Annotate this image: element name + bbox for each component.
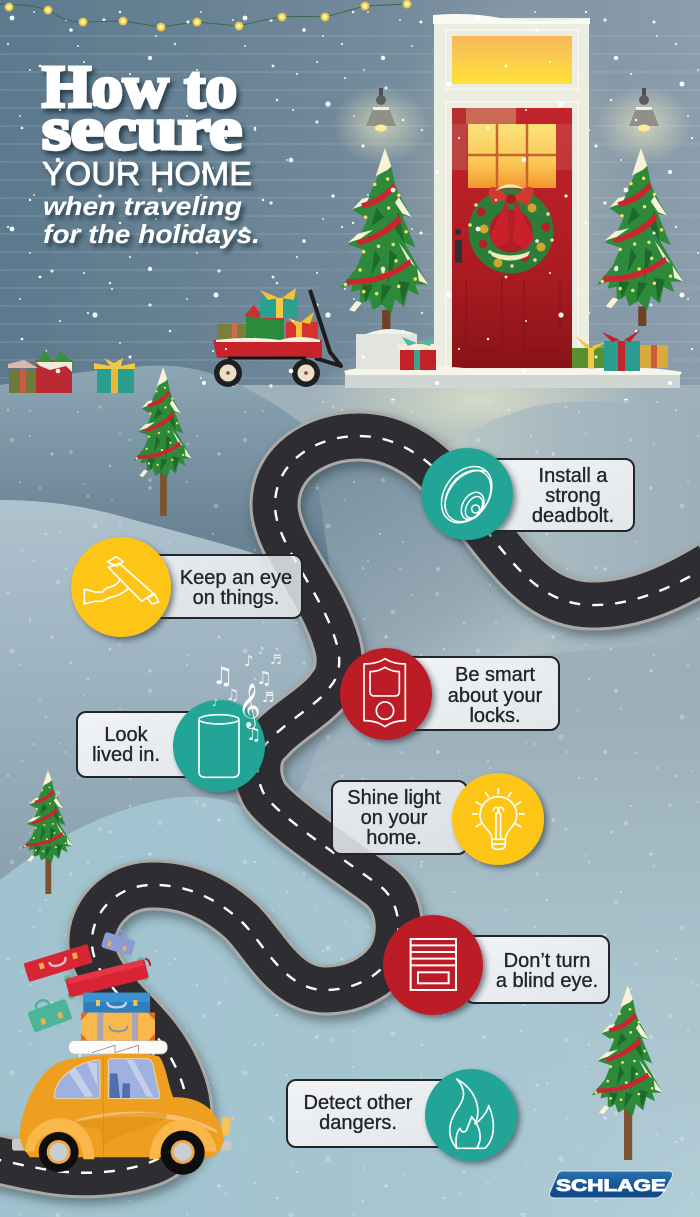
callout: shine light on your home: [332, 773, 544, 865]
callout: be smart about your locks: locks.: [469, 705, 521, 727]
badge: light bulb icon: [452, 773, 544, 865]
callout: don't turn a blind eye: Don’t turn: [504, 950, 590, 972]
tree bottom right: [591, 985, 663, 1160]
front door: [433, 14, 590, 370]
music notes: ♬: [270, 653, 282, 668]
music notes: 𝄞: [238, 683, 260, 729]
music notes: ♫: [256, 668, 272, 689]
music notes: ♪: [212, 698, 218, 709]
porch lamp glows: [333, 0, 692, 400]
callout: be smart about your locks: Be smart: [455, 664, 535, 686]
callout: be smart about your locks: about your: [448, 685, 543, 707]
badge: smart speaker icon: [173, 700, 265, 792]
callout: keep an eye on things: Keep an eye: [180, 567, 292, 589]
wagon with gifts: [213, 288, 341, 387]
badge: security camera icon: [71, 537, 171, 637]
door handle: [455, 229, 462, 263]
wagon wheels: [214, 359, 320, 387]
callout: keep an eye on things: [71, 537, 302, 637]
callout: shine light on your home: Shine light: [347, 787, 441, 809]
tree far left: [22, 770, 73, 894]
schlage logo: [550, 1171, 672, 1198]
car with luggage: [12, 927, 232, 1175]
red door panel: [452, 108, 572, 368]
suitcase: red large: [63, 955, 154, 1000]
music notes: [212, 646, 282, 745]
title: YOUR HOME: [42, 155, 252, 192]
music notes: ♫: [212, 662, 234, 690]
background: house siding wall: [0, 0, 700, 400]
title: [42, 54, 260, 249]
suitcase: red upper: [24, 944, 93, 982]
callout: shine light on your home: on your: [361, 807, 428, 829]
string lights: [0, 1, 410, 30]
callout: look lived in: [77, 646, 282, 792]
music notes: ♬: [262, 690, 275, 706]
badge: flame icon: [425, 1069, 517, 1161]
car windows: [54, 1059, 160, 1099]
tree beside door right: [597, 148, 683, 326]
car wheels: [39, 1131, 205, 1175]
tree beside door left: [340, 148, 428, 330]
gifts right of door: [572, 330, 668, 371]
callout: install a strong deadbolt: strong: [545, 485, 601, 507]
music notes: ♫: [226, 686, 239, 704]
badge: window blinds icon: [383, 915, 483, 1015]
callout: don't turn a blind eye: a blind eye.: [496, 970, 598, 992]
title: for the holidays.: [43, 219, 260, 249]
wagon gifts: [217, 288, 318, 340]
tree on upper hill: [133, 367, 192, 516]
callout: be smart about your locks: [340, 648, 559, 740]
winding road: [0, 436, 700, 1173]
title: secure: [42, 96, 242, 162]
callout: don't turn a blind eye: [383, 915, 609, 1015]
suitcase: purple small: [101, 927, 137, 956]
title: when traveling: [43, 191, 242, 221]
callout: look lived in: Look: [104, 724, 149, 746]
music notes: ♫: [246, 725, 261, 745]
falling snow: over the house: [0, 0, 700, 400]
background: snowy hills: [0, 330, 700, 1217]
suitcase: blue: [83, 993, 150, 1013]
door window: [468, 124, 556, 188]
music notes: ♪: [258, 646, 264, 657]
badge: deadbolt icon: [421, 448, 513, 540]
callout: detect other dangers: Detect other: [304, 1092, 413, 1114]
callout: install a strong deadbolt: deadbolt.: [532, 505, 614, 527]
callout: detect other dangers: dangers.: [319, 1112, 397, 1134]
gifts on hill left: [8, 350, 73, 393]
badge: smart lock icon: [340, 648, 432, 740]
porch step: [344, 366, 682, 388]
callout: install a strong deadbolt: Install a: [539, 465, 608, 487]
music notes: ♪: [244, 652, 254, 670]
schlage logo: SCHLAGE: [556, 1177, 666, 1195]
roof rack: [69, 1041, 167, 1059]
car fenders: [25, 1118, 94, 1159]
callout: shine light on your home: home.: [366, 827, 422, 849]
planter and gift left of door: [356, 329, 438, 370]
suitcase: orange: [81, 1013, 155, 1041]
title: How to: [42, 54, 237, 120]
callout: keep an eye on things: on things.: [193, 587, 279, 609]
wall lamp left: [366, 88, 396, 132]
callout: look lived in: lived in.: [92, 744, 160, 766]
car body: [12, 1054, 232, 1175]
wall lamp right: [629, 88, 659, 132]
callout: install a strong deadbolt: [421, 448, 634, 540]
callout: detect other dangers: [287, 1069, 517, 1161]
transom window: [452, 36, 572, 84]
gift on hill: [94, 358, 135, 393]
wreath: [468, 184, 554, 268]
suitcase: teal small: [25, 993, 73, 1033]
